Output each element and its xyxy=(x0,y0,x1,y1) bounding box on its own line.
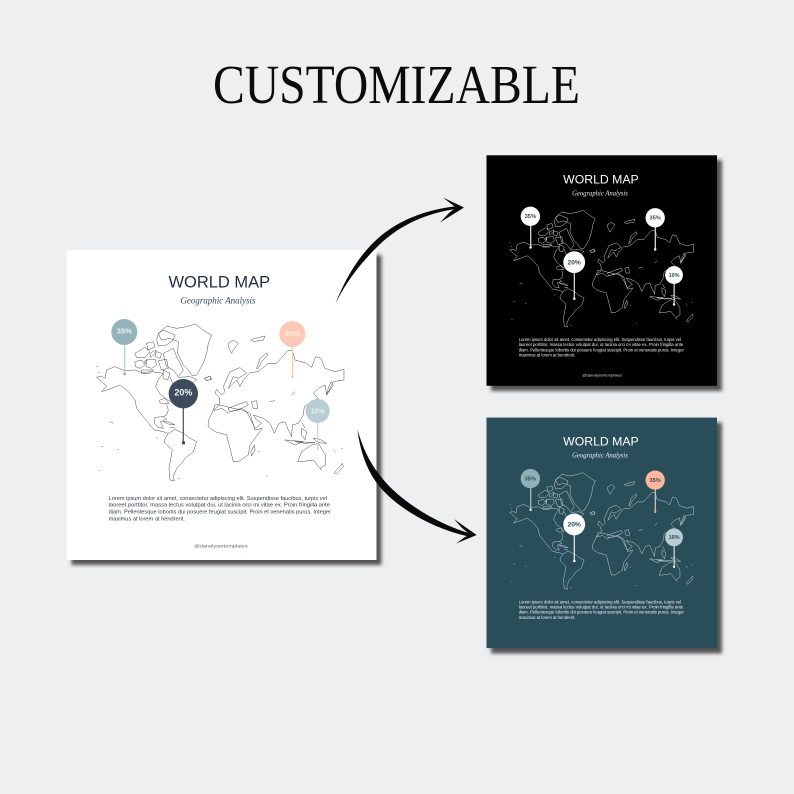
world map outline xyxy=(97,324,344,481)
pin: 20% south america: 20% xyxy=(174,387,192,397)
body text: Lorem ipsum dolor sit amet, consectetur adipiscing elit. Suspendisse faucibus, turpis vel xyxy=(519,599,681,604)
body text: laoreet porttitor, massa lectus volutpat dui, ut lacinia orci mi vitae ex. Proin fringilla ante xyxy=(519,342,684,347)
body text xyxy=(519,599,684,620)
panel: teal template xyxy=(486,418,722,654)
body text: Lorem ipsum dolor sit amet, consectetur adipiscing elit. Suspendisse faucibus, turpis vel xyxy=(109,496,327,502)
pin: 35% russia xyxy=(646,470,665,513)
world map outline xyxy=(510,473,694,589)
body text: diam. Pellentesque lobortis dui posuere feugiat suscipit. Proin et venenatis purus. Integer xyxy=(109,510,331,516)
footer handle: @danalysertemplates xyxy=(582,373,622,377)
pin: 10% australia xyxy=(306,399,330,450)
body text: maximus at lorem at hendrerit. xyxy=(519,615,575,620)
body text: laoreet porttitor, massa lectus volutpat dui, ut lacinia orci mi vitae ex. Proin fringilla ante xyxy=(109,503,330,509)
arrow: white to black template xyxy=(336,198,464,304)
subheading: Geographic Analysis xyxy=(572,189,628,197)
pin: 10% australia: 10% xyxy=(669,273,680,279)
body text xyxy=(519,337,684,358)
pin: 10% australia: 10% xyxy=(669,535,680,541)
panel: white template xyxy=(66,250,382,565)
panel: black template xyxy=(486,155,722,391)
body text: maximus at lorem at hendrerit. xyxy=(109,517,185,523)
body text: Lorem ipsum dolor sit amet, consectetur adipiscing elit. Suspendisse faucibus, turpis vel xyxy=(519,337,681,342)
pin: 35% russia: 35% xyxy=(649,478,661,484)
body text xyxy=(109,496,331,523)
title: CUSTOMIZABLE xyxy=(213,54,580,115)
pin: 10% australia xyxy=(665,528,683,568)
pin: 10% australia xyxy=(665,266,683,306)
pin: 10% australia: 10% xyxy=(311,408,325,415)
pin: 20% south america: 20% xyxy=(568,522,581,529)
pin: 20% south america xyxy=(563,251,585,300)
body text: diam. Pellentesque lobortis dui posuere feugiat suscipit. Proin et venenatis purus. Integer xyxy=(519,610,684,615)
body text: diam. Pellentesque lobortis dui posuere feugiat suscipit. Proin et venenatis purus. Integer xyxy=(519,347,684,352)
pin: 35% north america xyxy=(521,469,540,511)
body text: maximus at lorem at hendrerit. xyxy=(519,353,575,358)
heading: world map: WORLD MAP xyxy=(563,435,639,449)
arrow: white to teal template xyxy=(357,429,477,544)
subheading: Geographic Analysis xyxy=(572,452,628,460)
pin: 35% russia xyxy=(279,321,305,378)
world map outline xyxy=(510,210,694,327)
footer handle: @danalysertemplates xyxy=(194,543,248,549)
pin: 35% russia xyxy=(646,208,665,251)
heading: world map: WORLD MAP xyxy=(563,172,639,186)
heading: world map: WORLD MAP xyxy=(168,273,270,292)
pin: 35% north america xyxy=(521,207,540,249)
pin: 20% south america xyxy=(563,514,585,562)
pin: 35% russia: 35% xyxy=(649,216,661,222)
pin: 35% russia: 35% xyxy=(285,329,300,338)
pin: 35% north america xyxy=(111,319,137,375)
pin: 35% north america: 35% xyxy=(525,476,536,482)
pin: 20% south america: 20% xyxy=(568,259,581,266)
subheading: Geographic Analysis xyxy=(180,296,256,307)
pin: 35% north america: 35% xyxy=(117,327,132,336)
body text: laoreet porttitor, massa lectus volutpat dui, ut lacinia orci mi vitae ex. Proin fringilla ante xyxy=(519,604,684,609)
pin: 35% north america: 35% xyxy=(525,214,536,220)
pin: 20% south america xyxy=(169,379,198,444)
